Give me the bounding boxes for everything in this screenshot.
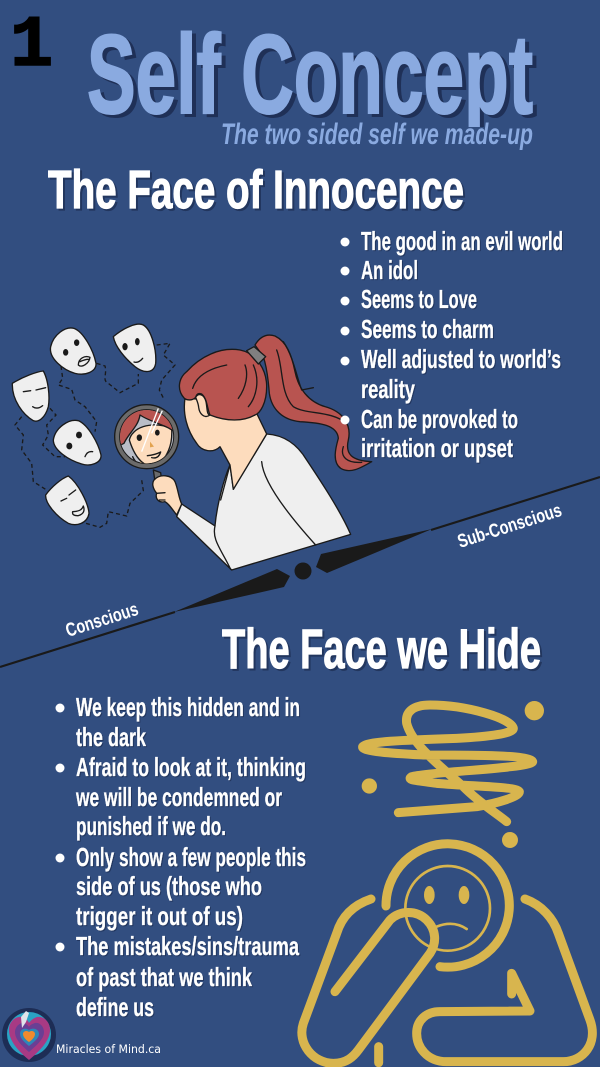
sad face — [405, 866, 490, 951]
bullet list: innocence: Can be provoked to — [361, 404, 518, 434]
thought dots — [362, 701, 544, 848]
woman body shirt — [177, 434, 351, 570]
label: conscious: Conscious — [63, 599, 141, 642]
bullet list: hidden face: side of us (those who — [76, 871, 262, 901]
left arm — [302, 899, 435, 1063]
mask: smiling — [113, 324, 156, 372]
label: sub-conscious: Sub-Conscious — [455, 500, 564, 553]
bullet list: hidden face: Afraid to look at it, thinking — [76, 752, 306, 782]
hair tie — [247, 347, 266, 364]
hand mirror — [115, 403, 179, 470]
scribble thought — [363, 705, 533, 822]
bullet list: innocence: irritation or upset — [361, 433, 513, 463]
torso mark — [365, 1047, 392, 1063]
bullet list: hidden face: of past that we think — [76, 962, 252, 992]
illustration: woman with mirror and masks — [12, 324, 372, 570]
bullet list: innocence: An idol — [361, 255, 418, 285]
bullet list: hidden face: we will be condemned or — [75, 782, 282, 812]
number badge: 1 — [10, 5, 53, 87]
bullet list: innocence — [340, 226, 563, 463]
woman ponytail — [255, 335, 372, 471]
dashed connecting lines — [15, 343, 175, 527]
logo: heart emblem — [2, 1008, 56, 1062]
mask: sad — [53, 420, 101, 465]
head — [386, 844, 509, 967]
bullet list: hidden face: Only show a few people this — [76, 842, 306, 872]
bullet list: hidden face: The mistakes/sins/trauma — [76, 931, 299, 961]
mask: laughing — [46, 476, 89, 525]
bullet list: hidden face: the dark — [76, 722, 146, 752]
bullet list: hidden face: trigger it out of us) — [76, 901, 243, 931]
bullet list: hidden face: punished if we do. — [76, 811, 226, 841]
woman hair — [179, 349, 267, 420]
woman neck and face — [184, 398, 267, 489]
bullet list: innocence: Seems to Love — [361, 284, 477, 314]
bullet list: hidden face — [56, 692, 306, 1022]
divider line with wedges — [0, 477, 600, 667]
logo text: Miracles of Mind.ca — [56, 1042, 161, 1056]
icon: worried person with scribble — [302, 701, 592, 1063]
bullet list: hidden face: define us — [76, 992, 154, 1022]
bullet list: hidden face: We keep this hidden and in — [76, 692, 300, 722]
hand holding mirror — [153, 470, 182, 515]
bullet list: innocence: reality — [361, 374, 415, 404]
right arm — [417, 899, 592, 1062]
mask: closed eyes — [12, 371, 49, 421]
woman ear — [196, 395, 210, 416]
mask: frowning — [50, 328, 96, 374]
bullet list: innocence: Seems to charm — [361, 314, 494, 344]
